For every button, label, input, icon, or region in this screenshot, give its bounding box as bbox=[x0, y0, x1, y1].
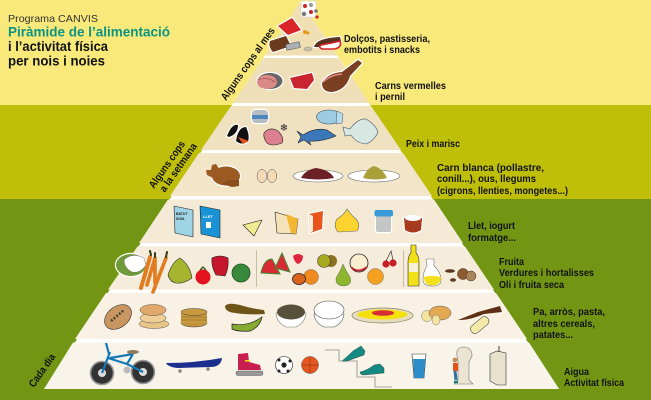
icon: olive oil bottle bbox=[408, 245, 419, 286]
icon: salmon steak bbox=[264, 129, 283, 145]
icon: tin can bbox=[252, 110, 268, 123]
icon: apple bbox=[350, 254, 368, 272]
icon: stairs and trainers bbox=[325, 346, 392, 387]
icon: cherries bbox=[382, 251, 397, 268]
label: water and activity: Aigua bbox=[564, 366, 589, 378]
frequency label: some times a month: Alguns cops al mes bbox=[219, 25, 278, 103]
icon: soy milk carton: BATUT bbox=[176, 212, 188, 216]
row 6: vegetables, fruit, oil bbox=[116, 245, 476, 292]
icon: bread loaf bbox=[100, 299, 136, 335]
label: fruit and vegetables: Fruita bbox=[499, 256, 524, 268]
icon: flatfish bbox=[343, 119, 378, 144]
icon: yogurt bbox=[374, 210, 393, 232]
label: sweets: Dolços, pastisseria, bbox=[344, 33, 430, 45]
label: white meat: Carn blanca (pollastre, bbox=[437, 162, 544, 174]
label: fish: Peix i marisc bbox=[406, 138, 460, 150]
label: cereals: patates... bbox=[533, 329, 573, 341]
divider: vegetables and fruit bbox=[256, 250, 257, 287]
icon: milk carton bbox=[200, 206, 220, 238]
icon: plate of beans bbox=[293, 168, 343, 182]
label: fruit and vegetables: Oli i fruita seca bbox=[499, 279, 564, 291]
icon: tomato bbox=[196, 267, 210, 284]
row 8: water and physical activity bbox=[90, 343, 506, 387]
icon: cauliflower bbox=[116, 254, 146, 276]
title: Piràmide de l’alimentació bbox=[8, 24, 170, 40]
icon: tuna bbox=[297, 129, 336, 145]
icon: pear bbox=[336, 264, 351, 286]
frequency label: some times a week: Alguns cops bbox=[147, 139, 188, 191]
label: cereals: altres cereals, bbox=[533, 318, 595, 330]
icon: lettuce bbox=[168, 258, 192, 283]
icon: drinking fountain and child bbox=[453, 347, 473, 384]
icon: artichoke bbox=[232, 264, 250, 282]
title: Programa CANVIS bbox=[8, 13, 98, 25]
label: fruit and vegetables bbox=[499, 256, 594, 291]
row 1: sweets and snacks bbox=[269, 1, 341, 52]
frequency label: some times a week: a la setmana bbox=[157, 141, 200, 195]
row 3: fish bbox=[227, 110, 378, 145]
icon: orange cheese bbox=[309, 211, 323, 233]
icon: oranges bbox=[292, 270, 318, 284]
icon: sausage bbox=[314, 37, 341, 49]
label: cereals bbox=[533, 306, 605, 341]
label: sweets: embotits i snacks bbox=[344, 44, 420, 56]
divider: fruit and oil bbox=[403, 250, 404, 287]
icon: rice bowl bbox=[314, 301, 344, 327]
icon: basketball bbox=[302, 356, 318, 374]
icon: bicycle bbox=[90, 343, 154, 384]
icon: flat breads bbox=[139, 304, 169, 328]
pyramid bbox=[44, 1, 559, 389]
icon: steak bbox=[290, 73, 314, 89]
icon: long bread bbox=[225, 304, 265, 314]
icon: milk carton: LLET bbox=[203, 214, 214, 219]
label: white meat bbox=[437, 162, 568, 197]
icon: roast chicken bbox=[206, 164, 240, 187]
title bbox=[8, 13, 170, 68]
label: white meat: (cigrons, llenties, mongetes...) bbox=[437, 185, 568, 197]
icon: crisps bag bbox=[278, 18, 310, 35]
icon: sliced meat bbox=[257, 73, 282, 89]
icon: football bbox=[276, 356, 292, 374]
icon: eggs bbox=[257, 169, 277, 183]
icon: cereal bowl bbox=[276, 304, 306, 327]
icon: mussels bbox=[227, 125, 249, 144]
icon: soy milk carton: SOIA bbox=[176, 217, 185, 221]
icon: strawberry bbox=[293, 254, 303, 264]
icon: cheese wedge bbox=[243, 220, 262, 236]
icon: ceramic bowl bbox=[404, 215, 422, 232]
row 2: red meat bbox=[257, 60, 362, 92]
icon: nuts bbox=[304, 47, 312, 51]
row 4: white meat, eggs, legumes bbox=[206, 164, 400, 187]
icon: snowflake: ❄ bbox=[280, 123, 288, 134]
icon: plate of pasta bbox=[352, 308, 413, 323]
icon: watermelon bbox=[261, 253, 290, 274]
background band: weekly bbox=[0, 105, 651, 199]
title: per nois i noies bbox=[8, 52, 105, 68]
icon: kiwi bbox=[318, 254, 337, 268]
label: red meat: i pernil bbox=[375, 91, 405, 103]
icon: blue cheese bbox=[275, 212, 298, 234]
label: water and activity bbox=[564, 366, 624, 389]
icon: red pepper bbox=[212, 256, 228, 276]
label: water and activity: Activitat física bbox=[564, 377, 624, 389]
icon: blue box bbox=[316, 110, 343, 124]
icon: soy milk carton bbox=[174, 206, 193, 237]
label: cereals: Pa, arròs, pasta, bbox=[533, 306, 605, 318]
icon: glass of water bbox=[412, 354, 426, 378]
icon: rolling pin and corn bbox=[458, 306, 502, 335]
icon: carrots bbox=[141, 251, 167, 292]
icon: water cooler bbox=[490, 346, 506, 385]
icon: chocolate roll bbox=[269, 36, 300, 52]
icon: inline skate bbox=[236, 353, 263, 376]
label: white meat: conill...), ous, llegums bbox=[437, 173, 536, 185]
label: sweets bbox=[344, 33, 430, 56]
icon: potatoes bbox=[422, 306, 451, 325]
icon: skateboard bbox=[166, 358, 222, 373]
icon: sweets bbox=[301, 1, 319, 19]
icon: toast stack bbox=[181, 308, 207, 327]
title: i l’activitat física bbox=[8, 38, 108, 54]
frequency label: every day: Cada dia bbox=[27, 352, 58, 390]
icon: oil jug bbox=[423, 259, 441, 286]
label: dairy: formatge... bbox=[468, 232, 516, 244]
icon: peach bbox=[368, 268, 384, 284]
label: red meat: Carns vermelles bbox=[375, 80, 446, 92]
icon: ham bbox=[322, 60, 362, 92]
label: dairy bbox=[468, 220, 516, 244]
icon: round yellow cheese bbox=[335, 209, 359, 232]
background band: occasional bbox=[0, 0, 651, 105]
row 7: cereals bbox=[100, 299, 502, 335]
label: fruit and vegetables: Verdures i hortalisses bbox=[499, 267, 594, 279]
icon: green plantain bbox=[232, 317, 262, 331]
background band: daily bbox=[0, 199, 651, 400]
label: dairy: Llet, iogurt bbox=[468, 220, 515, 232]
label: red meat bbox=[375, 80, 446, 103]
icon: plate of chickpeas bbox=[348, 166, 400, 182]
icon: nuts bbox=[445, 268, 476, 282]
row 5: dairy bbox=[174, 206, 422, 238]
